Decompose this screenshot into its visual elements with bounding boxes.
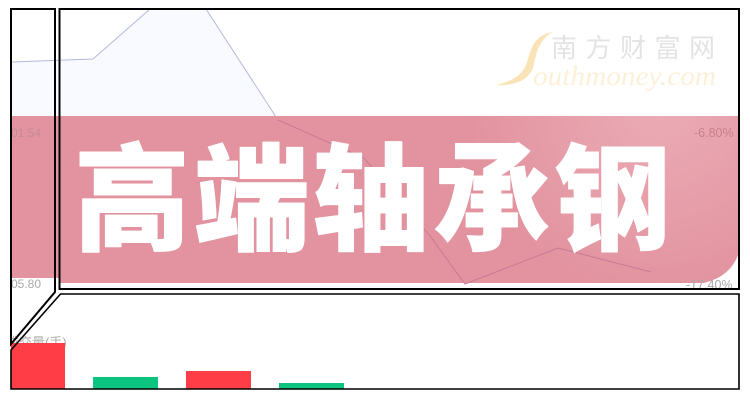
bar 1 xyxy=(11,343,65,389)
axis label: left lower: 05.80 xyxy=(11,277,41,291)
title: 承 xyxy=(434,107,550,275)
line chart: price line above band xyxy=(11,9,278,120)
pink banner xyxy=(11,116,739,283)
title: 轴 xyxy=(313,107,429,275)
line chart: price line over band xyxy=(278,120,651,284)
bar 3 xyxy=(186,371,251,389)
frame: main panel xyxy=(60,9,739,289)
axis label: right upper: -6.80% xyxy=(694,126,734,140)
frame: left column xyxy=(11,9,55,344)
axis label: volume: 成交量(手) xyxy=(6,335,67,350)
frame: bottom panel xyxy=(11,294,739,389)
watermark chinese name: 南方财富网 xyxy=(551,33,715,63)
area chart: line fill xyxy=(11,9,278,120)
axis label: right lower: -17.40% xyxy=(686,278,733,292)
bar 4 xyxy=(279,383,344,389)
icon: logo swoosh xyxy=(496,32,553,85)
watermark: southmoney logo xyxy=(496,32,716,91)
axis label: left upper: 01.54 xyxy=(11,126,41,140)
title xyxy=(74,107,670,275)
volume bars xyxy=(11,343,344,389)
title: 端 xyxy=(194,107,310,275)
title: 钢 xyxy=(554,107,670,275)
title: 高 xyxy=(74,107,190,275)
watermark url: outhmoney.com xyxy=(533,61,716,91)
bar 2 xyxy=(93,377,158,389)
